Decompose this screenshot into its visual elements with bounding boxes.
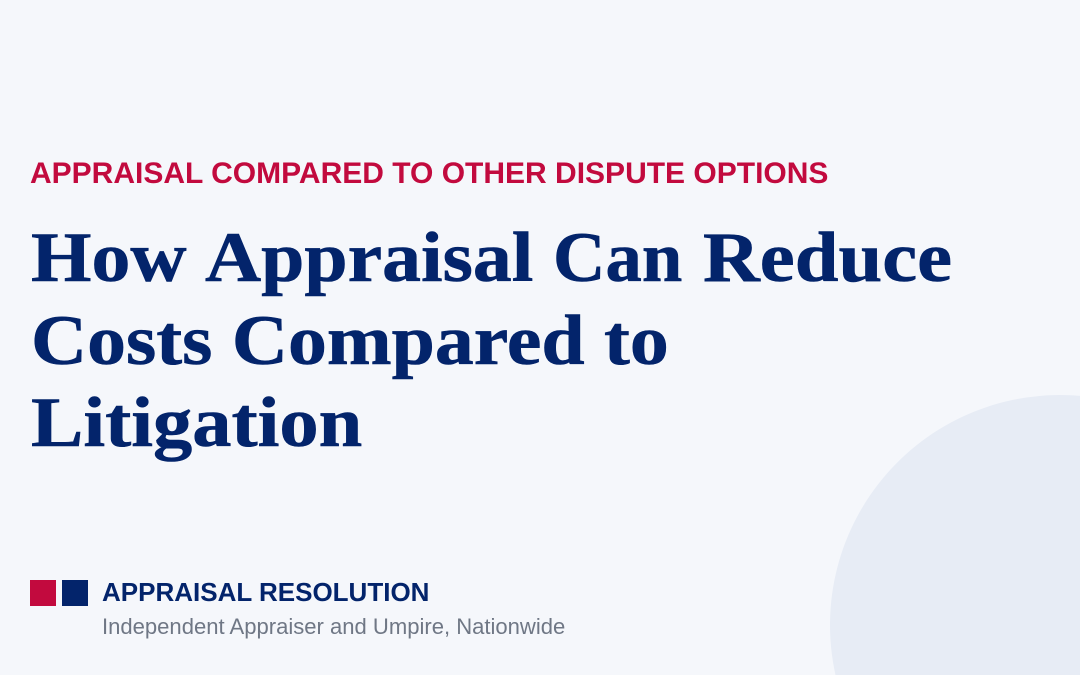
decorative circle	[830, 395, 1080, 675]
title: Reduce	[703, 219, 952, 297]
title	[31, 219, 952, 462]
eyebrow heading: APPRAISAL COMPARED TO OTHER DISPUTE OPTIONS	[30, 157, 828, 190]
brand tagline: Independent Appraiser and Umpire, Nationwide	[102, 614, 565, 639]
title: Appraisal	[205, 219, 533, 297]
brand name: APPRAISAL RESOLUTION	[102, 577, 429, 607]
brand logo: two squares	[30, 580, 88, 606]
title: Can	[552, 219, 682, 297]
title: Litigation	[31, 384, 362, 462]
title: How	[31, 219, 186, 297]
title: Costs Compared to	[31, 302, 669, 380]
